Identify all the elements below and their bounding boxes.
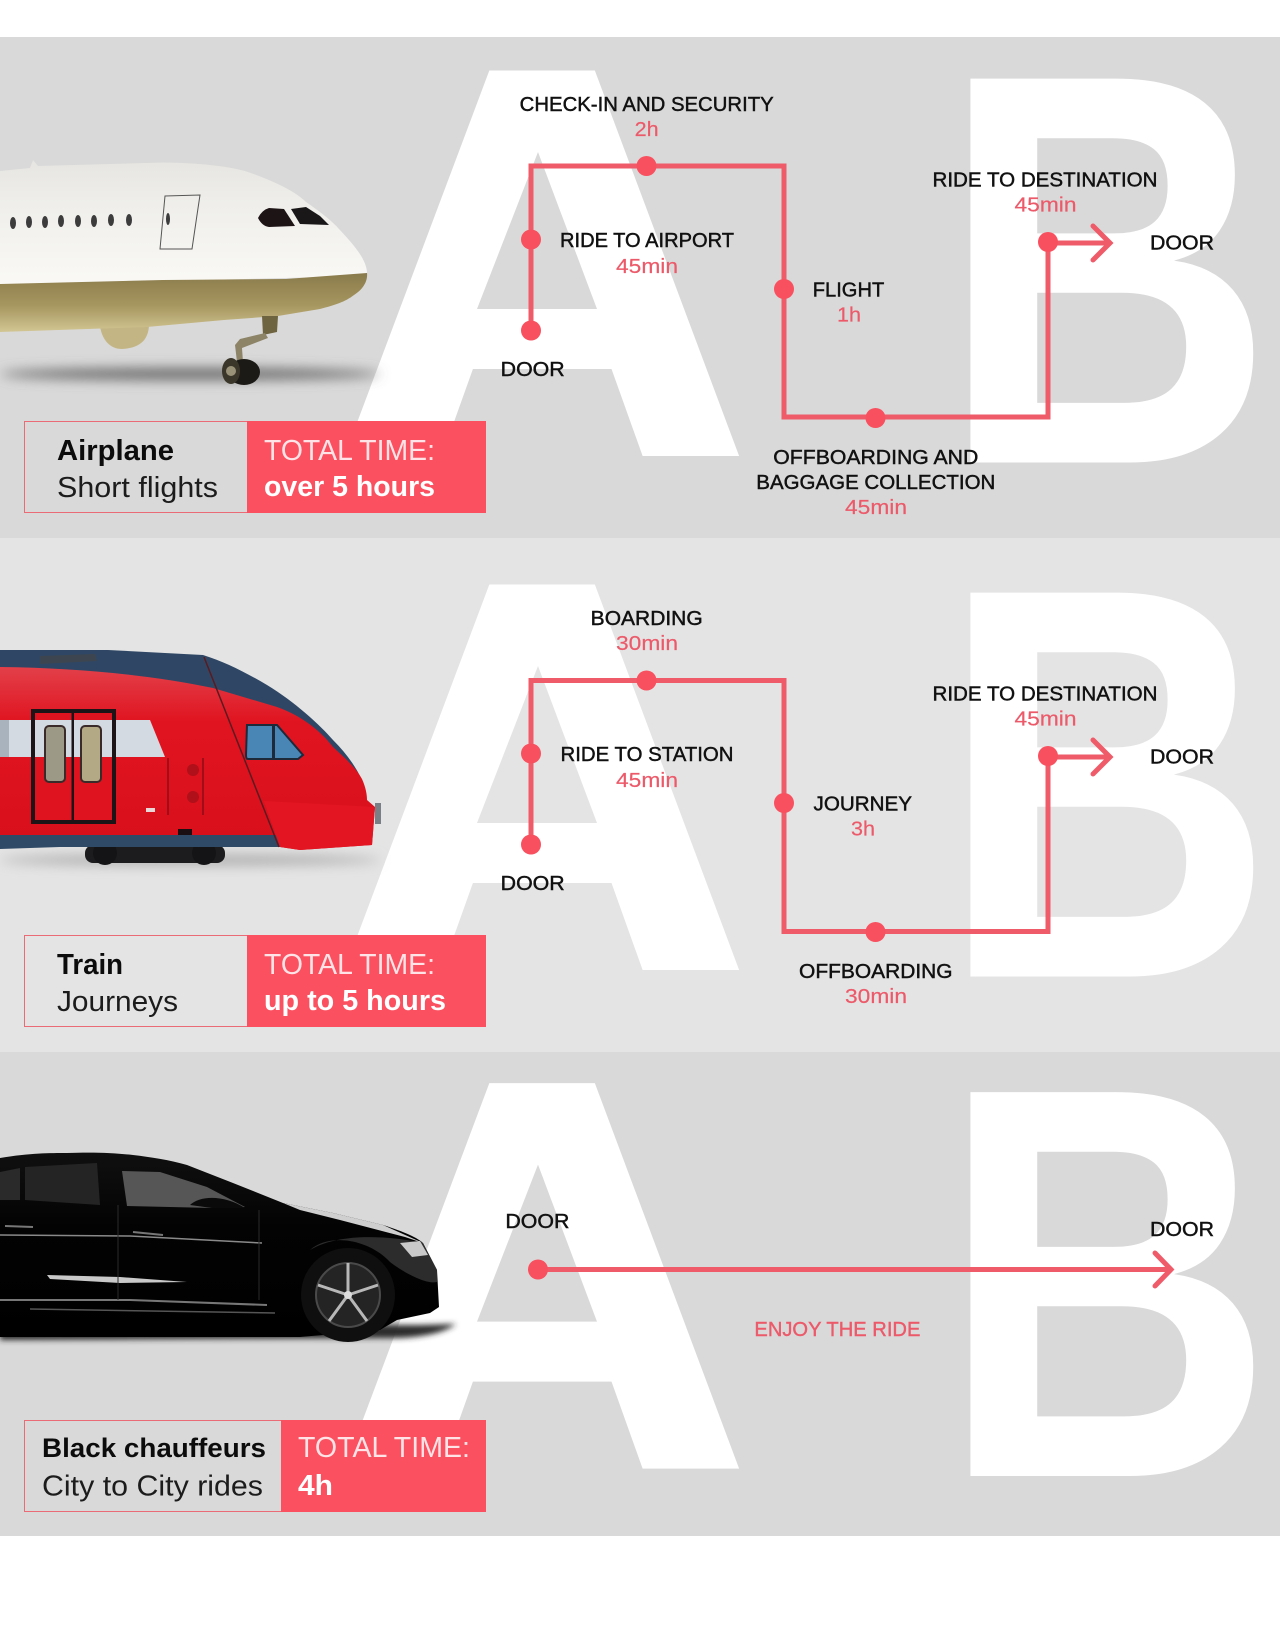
step: flight: FLIGHT xyxy=(813,280,884,302)
route: airplane xyxy=(521,156,1110,428)
step: ride to airport xyxy=(560,230,734,278)
summary box: train: up to 5 hours xyxy=(264,985,446,1017)
step: offboarding xyxy=(799,961,953,1008)
summary box: train: TOTAL TIME: xyxy=(264,949,435,981)
step: offboarding: 30min xyxy=(845,986,907,1008)
summary box: black chauffeurs xyxy=(24,1420,486,1512)
panel: black chauffeurs xyxy=(0,971,1280,1595)
label: start door: DOOR xyxy=(501,359,565,381)
step: ride to destination: 45min xyxy=(1014,708,1076,730)
label: enjoy the ride: ENJOY THE RIDE xyxy=(754,1319,920,1341)
step: ride to destination xyxy=(932,170,1158,216)
label: start door: DOOR xyxy=(501,873,565,895)
summary box: train xyxy=(24,935,486,1027)
summary box: train: Journeys xyxy=(57,986,178,1018)
image: airplane xyxy=(0,160,380,385)
step: offboarding and baggage collection: OFFBOARDING AND xyxy=(773,447,978,469)
summary box: airplane xyxy=(24,421,486,513)
background letter B: B xyxy=(939,472,1274,1095)
label: start door: DOOR xyxy=(505,1211,569,1233)
image: car xyxy=(0,1153,456,1342)
background letter B: B xyxy=(939,971,1274,1595)
background letter A: A xyxy=(342,975,742,1575)
step: journey: 3h xyxy=(851,818,875,840)
step: offboarding: OFFBOARDING xyxy=(799,961,953,983)
step: boarding: BOARDING xyxy=(591,608,703,630)
summary box: black chauffeurs: 4h xyxy=(298,1470,333,1502)
summary box: black chauffeurs: Black chauffeurs xyxy=(42,1433,266,1463)
summary box: train: Train xyxy=(57,949,123,981)
panel: airplane xyxy=(0,0,1280,581)
step: check-in and security: 2h xyxy=(635,119,659,141)
step: ride to airport: RIDE TO AIRPORT xyxy=(560,230,734,252)
step: offboarding and baggage collection: 45min xyxy=(845,497,907,519)
image: train xyxy=(0,650,381,865)
step: journey: JOURNEY xyxy=(814,794,912,816)
summary box: black chauffeurs: City to City rides xyxy=(42,1470,263,1502)
label: end door: DOOR xyxy=(1150,1219,1214,1241)
step: ride to destination xyxy=(932,684,1158,730)
step: ride to destination: RIDE TO DESTINATION xyxy=(932,684,1158,706)
step: ride to destination: RIDE TO DESTINATION xyxy=(932,170,1158,192)
step: flight: 1h xyxy=(837,304,861,326)
step: ride to station: RIDE TO STATION xyxy=(560,744,734,766)
step: flight xyxy=(813,280,884,326)
step: offboarding and baggage collection: BAGGAGE COLLECTION xyxy=(756,472,995,494)
summary box: black chauffeurs: TOTAL TIME: xyxy=(298,1432,470,1464)
summary box: airplane: Short flights xyxy=(57,472,218,504)
step: journey xyxy=(814,794,912,840)
panel: train xyxy=(0,472,1280,1095)
step: offboarding and baggage collection xyxy=(756,447,995,519)
step: ride to station xyxy=(560,744,734,792)
step: ride to destination: 45min xyxy=(1014,194,1076,216)
summary box: airplane: TOTAL TIME: xyxy=(264,435,435,467)
summary box: airplane: over 5 hours xyxy=(264,471,435,503)
step: ride to station: 45min xyxy=(616,770,678,792)
step: boarding xyxy=(591,608,703,655)
step: check-in and security xyxy=(520,94,774,141)
step: check-in and security: CHECK-IN AND SECURITY xyxy=(520,94,774,116)
background letter A: A xyxy=(342,476,742,1076)
label: end door: DOOR xyxy=(1150,746,1214,768)
step: ride to airport: 45min xyxy=(616,256,678,278)
summary box: airplane: Airplane xyxy=(57,435,174,467)
route: train xyxy=(521,670,1110,942)
route: door to door xyxy=(528,1253,1171,1286)
step: boarding: 30min xyxy=(616,633,678,655)
label: end door: DOOR xyxy=(1150,232,1214,254)
